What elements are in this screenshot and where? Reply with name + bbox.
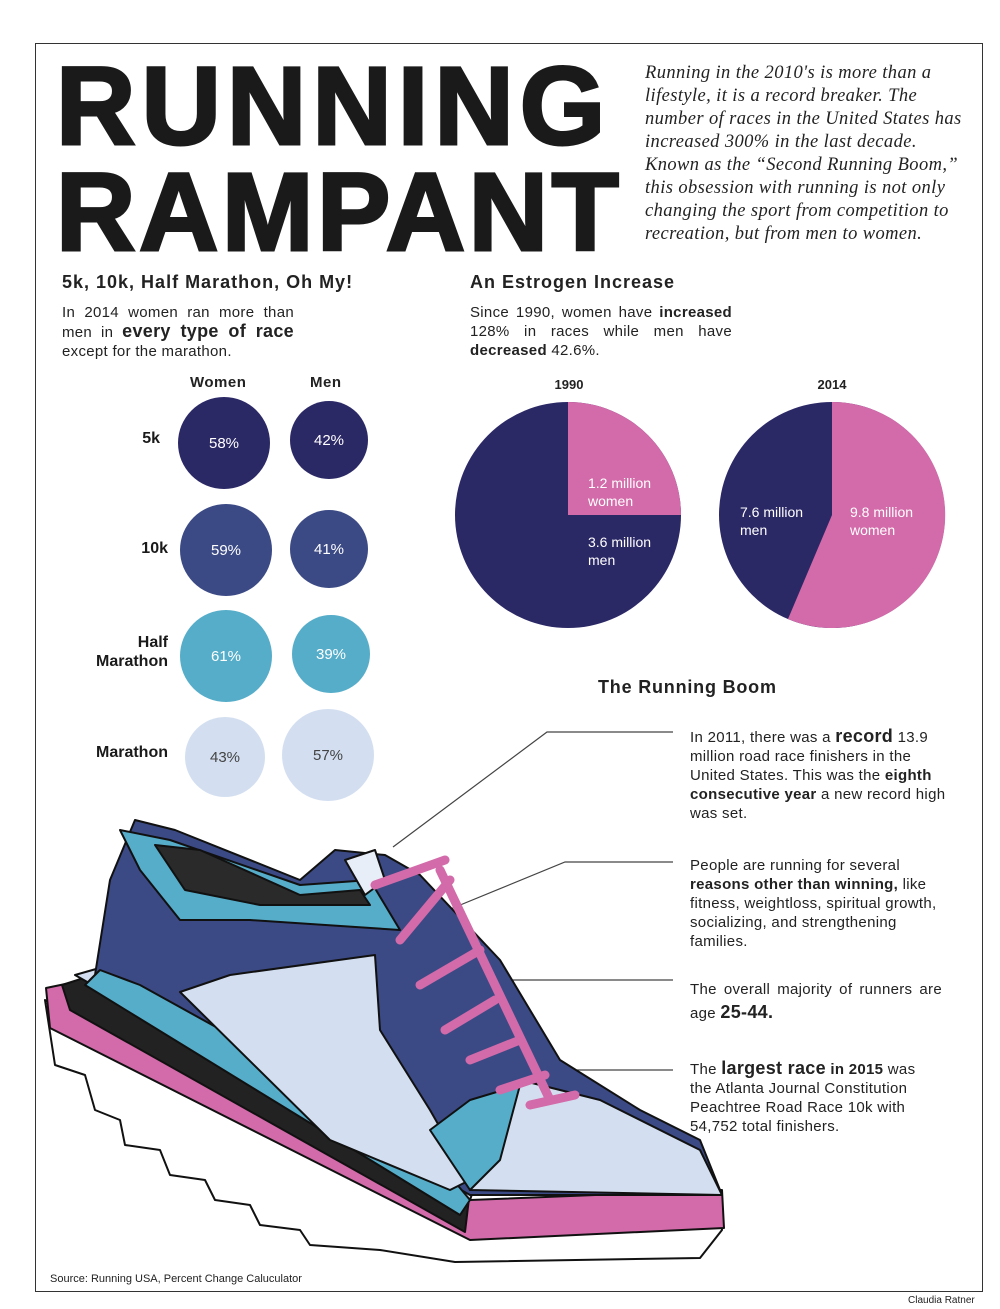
pie 2014: women xyxy=(849,522,895,538)
pie 2014 xyxy=(719,377,945,628)
row half marathon xyxy=(96,634,168,670)
title xyxy=(56,45,622,274)
shoe illustration with leader lines xyxy=(44,731,725,1263)
circle chart: 61% xyxy=(211,648,241,664)
pie 2014: 2014 xyxy=(818,377,847,392)
row 5k: 5k xyxy=(142,430,160,447)
heading: race types: 5k, 10k, Half Marathon, Oh My! xyxy=(62,272,353,292)
circle chart xyxy=(96,374,374,801)
column headers: Women xyxy=(190,374,246,391)
circle chart: 41% xyxy=(314,540,344,558)
circle chart: 43% xyxy=(210,748,240,766)
pie 1990 xyxy=(455,377,681,628)
sole xyxy=(45,1000,722,1262)
circle chart: Men xyxy=(310,374,342,391)
pie 1990: 1.2 million xyxy=(588,475,651,491)
pie 1990: 1990 xyxy=(555,377,583,392)
pie 2014: men xyxy=(740,522,767,538)
text: race types: In 2014 women ran more than men in every type of race except for the marathon. xyxy=(62,304,294,360)
credit: Claudia Ratner xyxy=(908,1295,975,1306)
intro text: Running in the 2010's is more than a lifestyle, it is a record breaker. The number of races in the United States has increased 300% in the last decade. Known as the “Second Running Boom,” this obsession with running is not only changing the sport from competition to recreation, but from men to women. xyxy=(645,63,962,244)
pie 1990: men xyxy=(588,552,615,568)
circle chart: 57% xyxy=(313,746,343,764)
pie 1990: 3.6 million xyxy=(588,534,651,550)
pie 1990: women xyxy=(587,493,633,509)
callout 3: The overall majority of runners are age 25-44. xyxy=(690,981,942,1022)
row 10k: 10k xyxy=(141,540,168,557)
callout 4: The largest race in 2015 was the Atlanta Journal Constitution Peachtree Road Race 10k with 54,752 total finishers. xyxy=(690,1058,915,1135)
title: RUNNING xyxy=(56,45,611,168)
text: estrogen: Since 1990, women have increased 128% in races while men have decreased 42.6%. xyxy=(470,304,732,359)
circle chart: 58% xyxy=(209,434,239,452)
callout 2: People are running for several reasons other than winning, like fitness, weightloss, spiritual growth, socializing, and strengthening families. xyxy=(690,857,936,950)
title: RAMPANT xyxy=(56,151,622,274)
callout 1: In 2011, there was a record 13.9 million road race finishers in the United States. This was the eighth consecutive year a new record high was set. xyxy=(690,726,945,822)
circle chart: 42% xyxy=(314,432,344,448)
circle chart: 39% xyxy=(316,646,346,662)
pie charts xyxy=(455,377,946,628)
circle chart: 59% xyxy=(211,542,241,558)
row marathon: Marathon xyxy=(96,744,168,761)
heading: estrogen: An Estrogen Increase xyxy=(470,272,675,292)
pie 2014: 7.6 million xyxy=(740,504,803,520)
source: Source: Running USA, Percent Change Caluculator xyxy=(50,1273,302,1285)
laces xyxy=(375,860,575,1105)
upper xyxy=(90,820,722,1195)
row half marathon: Marathon xyxy=(96,653,168,670)
row half marathon: Half xyxy=(138,634,168,651)
pie 2014: 9.8 million xyxy=(850,504,913,520)
heading: running boom: The Running Boom xyxy=(598,677,777,697)
